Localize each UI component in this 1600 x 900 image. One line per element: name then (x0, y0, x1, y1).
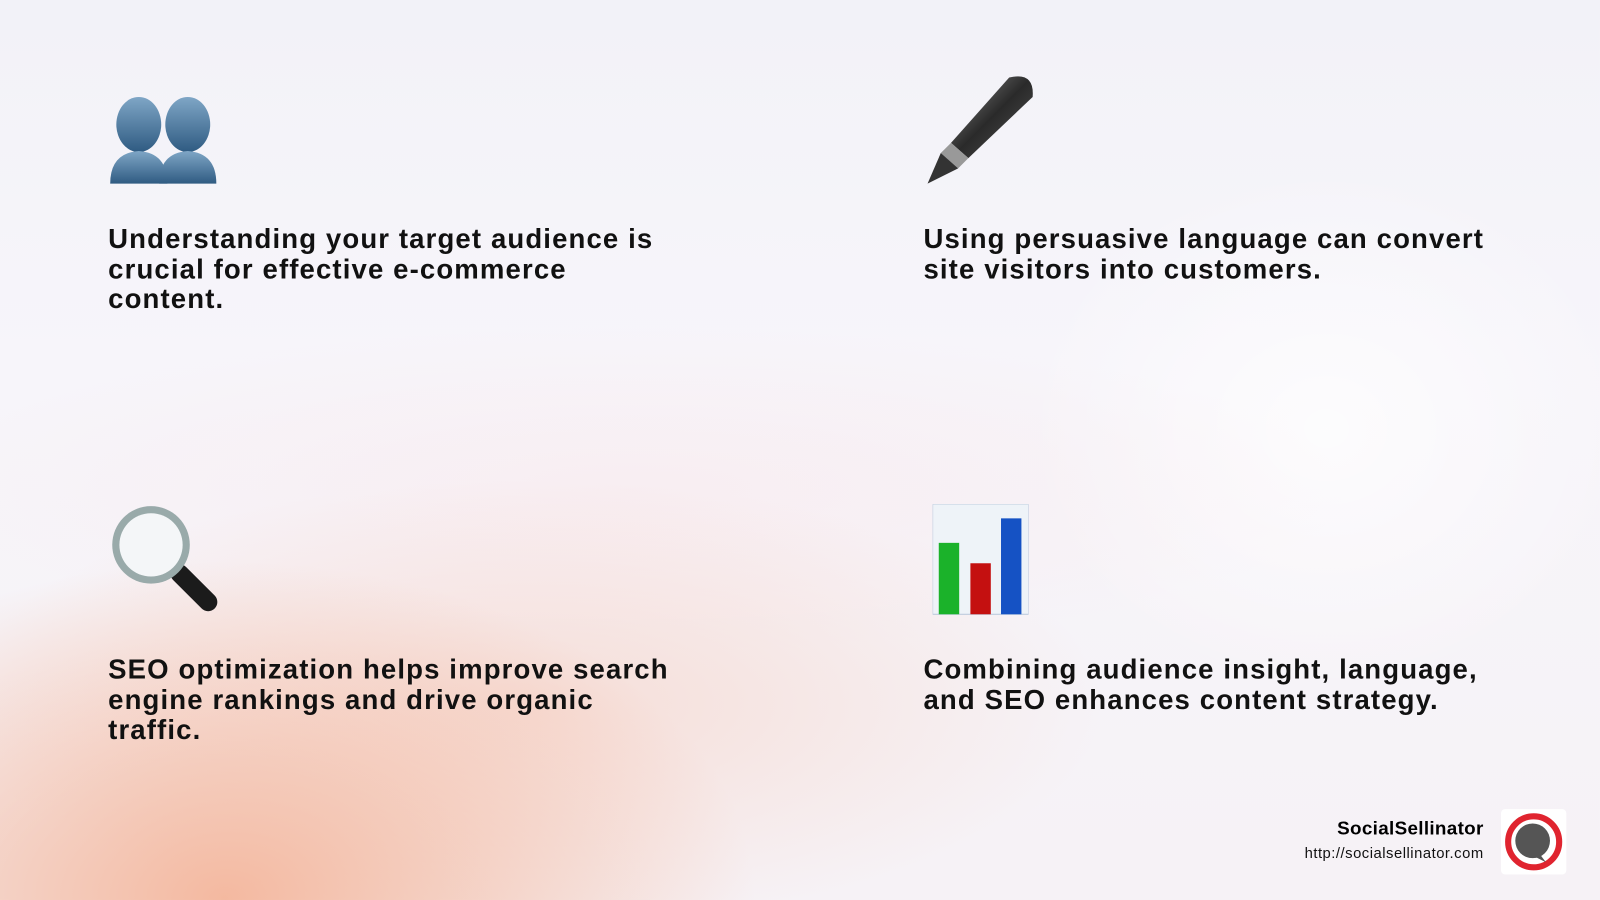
text: SEO: traffic. (108, 714, 201, 745)
icon: people (110, 97, 216, 184)
text: persuasive: Using persuasive language can convert (923, 223, 1484, 254)
text: combining (923, 654, 1478, 715)
text: audience: content. (108, 284, 224, 314)
text: SEO: SEO optimization helps improve search (108, 654, 669, 685)
icon: bar chart (932, 504, 1028, 615)
footer brand: SocialSellinator (1337, 817, 1484, 839)
text: audience (108, 223, 653, 314)
footer brand: http://socialsellinator.com (1305, 846, 1484, 862)
footer brand (1305, 817, 1484, 862)
icon: magnifier (112, 506, 218, 612)
text: audience: crucial for effective e-commerce (108, 254, 567, 284)
text: audience: Understanding your target audience is (108, 223, 653, 254)
text: persuasive (923, 223, 1484, 284)
icon: pen (928, 76, 1033, 184)
text: SEO: engine rankings and drive organic (108, 684, 594, 715)
logo (1501, 809, 1566, 874)
text: combining: and SEO enhances content strategy. (923, 684, 1439, 715)
text: persuasive: site visitors into customers. (923, 254, 1322, 284)
text: combining: Combining audience insight, language, (923, 654, 1478, 685)
text: SEO (108, 654, 669, 745)
